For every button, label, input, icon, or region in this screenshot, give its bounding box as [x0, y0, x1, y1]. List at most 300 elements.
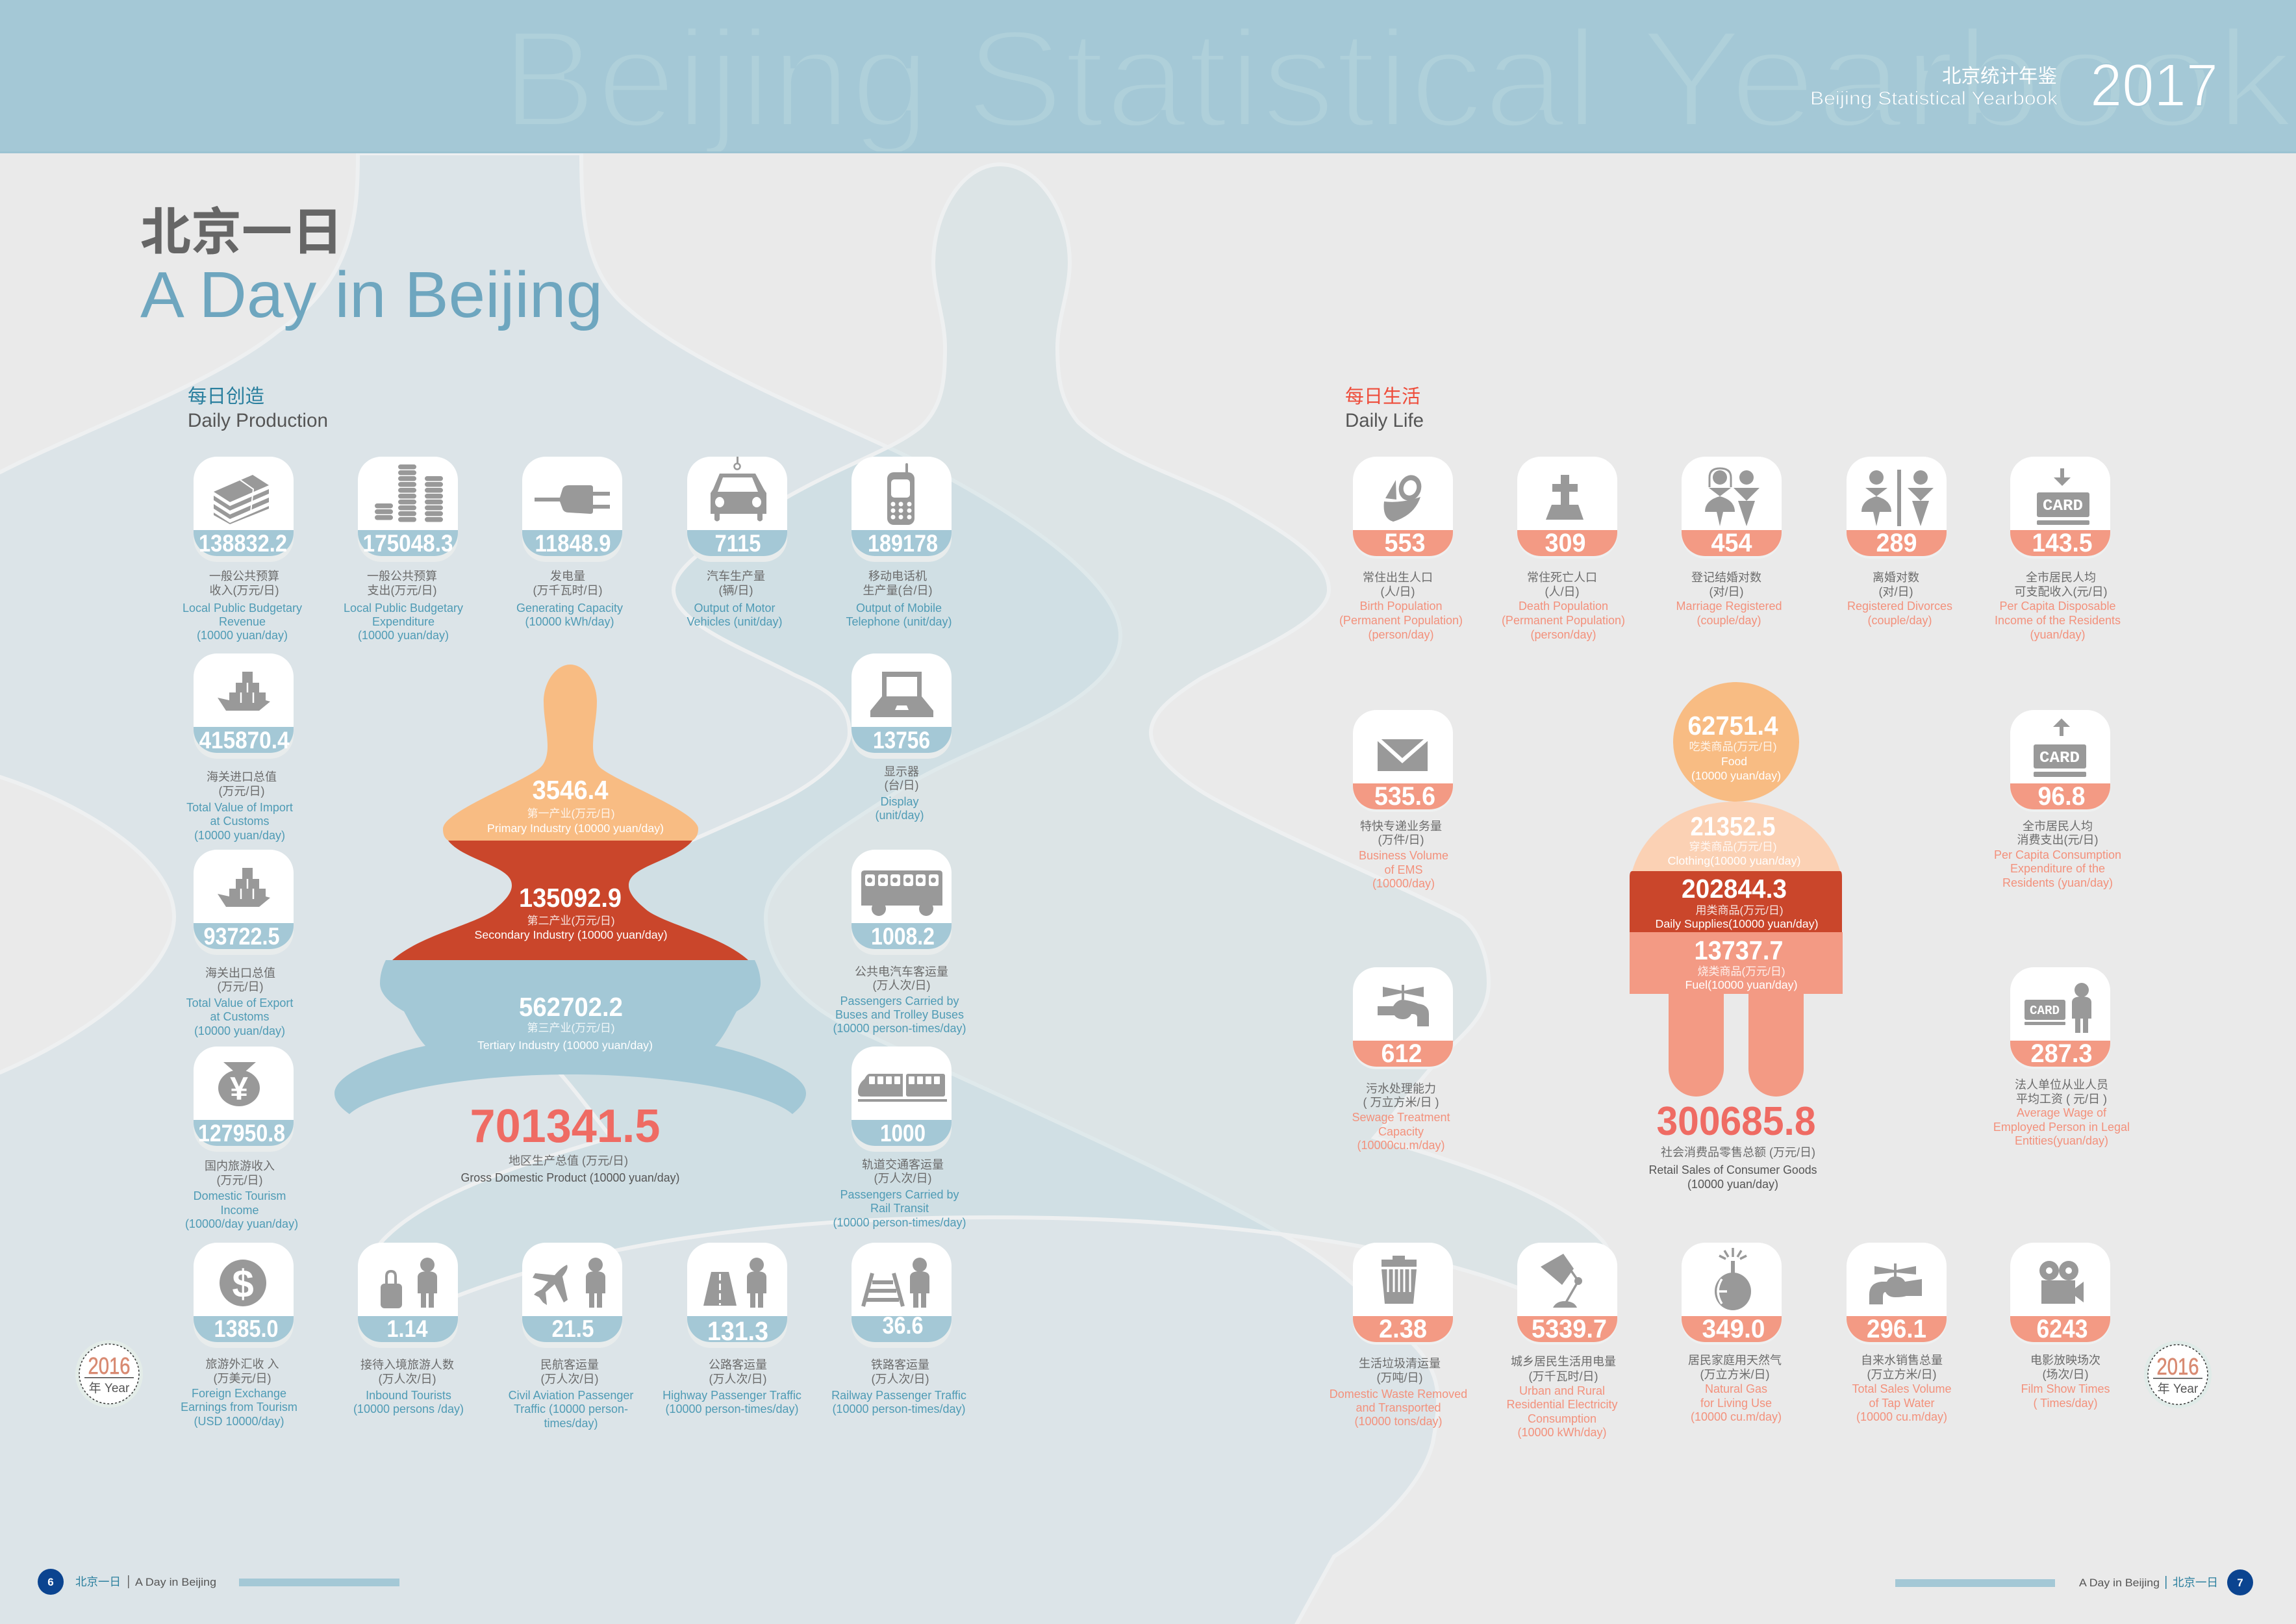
- value: 5339.7: [1532, 1315, 1607, 1343]
- label: (10000 yuan/day): [197, 629, 288, 642]
- label: [1847, 571, 1952, 627]
- value: 131.3: [707, 1316, 768, 1346]
- label: (台/日): [885, 779, 918, 792]
- footer: left: A Day in Beijing: [135, 1576, 216, 1588]
- label: 显示器: [884, 765, 919, 778]
- value: 287.3: [2030, 1039, 2093, 1068]
- label: Domestic Waste Removed: [1330, 1388, 1467, 1401]
- label: of EMS: [1384, 863, 1423, 876]
- label: Local Public Budgetary: [344, 602, 463, 615]
- value: tertiary: [477, 992, 653, 1052]
- label: [1852, 1354, 1952, 1423]
- value: tertiary: 562702.2: [519, 992, 623, 1022]
- value: clothing: 21352.5: [1690, 811, 1776, 841]
- label: (万人次/日): [540, 1373, 599, 1386]
- label: (万千瓦时/日): [533, 584, 603, 597]
- label: [662, 1358, 801, 1415]
- icon: card with up arrow: [2034, 718, 2086, 777]
- vase: tertiary industry: [334, 960, 806, 1114]
- icon: laptop: [870, 672, 933, 717]
- label: Revenue: [219, 615, 266, 628]
- value: 415870.4: [199, 727, 290, 754]
- label: [1993, 1078, 2130, 1147]
- icon: film camera: [2039, 1261, 2084, 1304]
- label: [2021, 1354, 2110, 1410]
- icon: yuan bag: ¥: [230, 1071, 248, 1107]
- icon: cargo ship: [218, 868, 270, 907]
- value: 612: [1381, 1039, 1422, 1068]
- person chart: retail sales: [1630, 682, 1843, 1191]
- person: daily supplies torso: [1630, 871, 1842, 932]
- label: [1506, 1355, 1618, 1439]
- value: primary: 第一产业(万元/日): [527, 807, 615, 820]
- label: (万千瓦时/日): [1529, 1370, 1598, 1383]
- value: 11848.9: [535, 530, 611, 557]
- icon: card with down arrow: CARD: [2043, 498, 2083, 515]
- label: 铁路客运量: [871, 1358, 929, 1371]
- label: (10000 yuan/day): [194, 1024, 285, 1037]
- label: Residential Electricity: [1506, 1398, 1618, 1411]
- label: 公共电汽车客运量: [855, 965, 948, 978]
- label: 可支配收入(元/日): [2015, 585, 2107, 598]
- card: budget revenue: [183, 457, 302, 642]
- label: [1352, 1082, 1450, 1152]
- footer: left: 6: [47, 1576, 54, 1588]
- label: (10000 person-times/day): [833, 1216, 966, 1229]
- label: Birth Population: [1359, 600, 1443, 613]
- badge: year 2016 right: 2016: [2156, 1353, 2199, 1380]
- card: budget expenditure: [344, 457, 463, 642]
- value: secondary: Secondary Industry (10000 yuan/day): [474, 928, 668, 941]
- card: highway traffic: [662, 1243, 801, 1415]
- card: railway traffic: [831, 1243, 966, 1415]
- label: (万人次/日): [872, 1373, 929, 1386]
- card: mobile telephones: [846, 457, 952, 628]
- label: Natural Gas: [1705, 1382, 1767, 1395]
- label: [353, 1358, 464, 1415]
- label: 海关出口总值: [205, 967, 275, 980]
- label: 常住死亡人口: [1527, 571, 1597, 584]
- label: 一般公共预算: [209, 570, 279, 583]
- label: Expenditure: [372, 615, 435, 628]
- value: 289: [1876, 529, 1917, 557]
- footer: left: [38, 1569, 399, 1595]
- total: GDP: 701341.5: [470, 1100, 660, 1152]
- value: clothing: [1668, 811, 1800, 867]
- icon: mobile phone: [887, 463, 915, 525]
- value: daily supplies: 202844.3: [1682, 874, 1787, 904]
- value: 1.14: [387, 1315, 428, 1342]
- label: Total Value of Export: [186, 996, 293, 1009]
- label: (couple/day): [1867, 614, 1932, 627]
- card: domestic waste: [1330, 1243, 1467, 1428]
- label: (万元/日): [217, 980, 264, 993]
- value: secondary: 第二产业(万元/日): [527, 915, 615, 927]
- label: 生产量(台/日): [863, 584, 933, 597]
- label: Residents (yuan/day): [2002, 876, 2113, 889]
- label: Generating Capacity: [516, 602, 623, 615]
- label: Entities(yuan/day): [2015, 1134, 2108, 1147]
- value: 189178: [868, 530, 938, 557]
- label: Income of the Residents: [1995, 614, 2121, 627]
- label: 城乡居民生活用电量: [1511, 1355, 1616, 1368]
- person: clothing shoulders: [1632, 802, 1840, 871]
- label: (unit/day): [875, 809, 924, 822]
- label: (万吨/日): [1377, 1371, 1422, 1384]
- label: (万元/日): [218, 785, 265, 798]
- label: (10000 yuan/day): [194, 829, 285, 842]
- label: Inbound Tourists: [366, 1389, 451, 1402]
- label: (万人次/日): [709, 1373, 766, 1386]
- card: bus passengers: [833, 850, 966, 1035]
- total: retail sales: Retail Sales of Consumer Goods: [1648, 1163, 1817, 1176]
- value: 1385.0: [214, 1315, 278, 1342]
- label: Marriage Registered: [1676, 600, 1782, 613]
- label: Output of Motor: [694, 602, 776, 615]
- label: Capacity: [1378, 1125, 1424, 1138]
- label: Total Value of Import: [186, 801, 293, 814]
- label: (10000cu.m/day): [1357, 1139, 1445, 1152]
- label: 旅游外汇收 入: [205, 1358, 279, 1371]
- label: Railway Passenger Traffic: [831, 1389, 966, 1402]
- title: A Day in Beijing: [140, 259, 603, 331]
- card: deaths: [1502, 457, 1625, 641]
- label: 特快专递业务量: [1360, 820, 1442, 833]
- label: 全市居民人均: [2023, 820, 2093, 833]
- label: 全市居民人均: [2026, 571, 2096, 584]
- label: (万人次/日): [873, 979, 930, 992]
- vase chart: gross domestic product: [334, 665, 806, 1184]
- label: [186, 770, 293, 842]
- icon: tap: [1378, 985, 1429, 1026]
- label: 公路客运量: [709, 1358, 767, 1371]
- icon: rail track and person: [863, 1258, 929, 1308]
- label: (10000 persons /day): [353, 1402, 464, 1415]
- label: [183, 570, 302, 642]
- footer: left: 北京一日: [75, 1575, 121, 1588]
- person: food head: [1673, 682, 1799, 802]
- label: 接待入境旅游人数: [360, 1358, 454, 1371]
- icon: separated couple: [1861, 470, 1934, 526]
- icon: plug: [535, 485, 610, 514]
- label: [833, 965, 966, 1035]
- value: tertiary: Tertiary Industry (10000 yuan/day): [477, 1039, 653, 1052]
- value: food: 吃类商品(万元/日): [1689, 741, 1777, 753]
- label: Per Capita Consumption: [1994, 848, 2121, 861]
- card: divorces: [1847, 457, 1952, 627]
- icon: car: [711, 457, 766, 521]
- total: GDP: [461, 1100, 679, 1184]
- label: [516, 570, 623, 628]
- background shape: vase silhouette: [375, 164, 1610, 1317]
- label: (10000 person-times/day): [832, 1402, 966, 1415]
- label: and Transported: [1356, 1401, 1441, 1414]
- value: 1008.2: [871, 923, 935, 950]
- label: Average Wage of: [2017, 1106, 2107, 1119]
- label: (万件/日): [1378, 833, 1424, 846]
- card: civil aviation: [509, 1243, 633, 1430]
- label: [344, 570, 463, 642]
- card: motor vehicles: [687, 457, 787, 628]
- label: Telephone (unit/day): [846, 615, 952, 628]
- label: 污水处理能力: [1366, 1082, 1436, 1095]
- label: Employed Person in Legal: [1993, 1121, 2130, 1134]
- label: Passengers Carried by: [840, 1188, 959, 1201]
- value: daily supplies: [1655, 874, 1819, 930]
- icon: road and person: [703, 1258, 766, 1308]
- total: retail sales: 300685.8: [1656, 1099, 1816, 1144]
- card: marriages: [1676, 457, 1782, 627]
- label: 消费支出(元/日): [2017, 833, 2098, 846]
- label: [1359, 820, 1448, 890]
- total: retail sales: [1648, 1099, 1817, 1191]
- value: primary: 3546.4: [533, 775, 609, 805]
- label: [1330, 1357, 1467, 1428]
- label: 汽车生产量: [707, 570, 765, 583]
- label: Registered Divorces: [1847, 600, 1952, 613]
- label: (10000 person-times/day): [833, 1022, 966, 1035]
- icon: bride and groom: [1705, 468, 1760, 526]
- label: (10000 kWh/day): [1517, 1426, 1607, 1439]
- label: (万立方米/日): [1867, 1368, 1937, 1381]
- label: 常住出生人口: [1363, 571, 1433, 584]
- label: 生活垃圾清运量: [1359, 1357, 1441, 1370]
- heading: daily life: 每日生活: [1345, 386, 1420, 407]
- label: 一般公共预算: [367, 570, 437, 583]
- label: (person/day): [1368, 628, 1434, 641]
- icon: gravestone: [1546, 475, 1583, 520]
- label: ( 万立方米/日 ): [1363, 1096, 1439, 1109]
- header watermark: Beijing: [501, 1, 930, 157]
- label: Death Population: [1519, 600, 1608, 613]
- label: for Living Use: [1700, 1397, 1772, 1410]
- value: food: (10000 yuan/day): [1691, 769, 1781, 782]
- icon: coin stacks: [375, 464, 443, 522]
- label: [1688, 1354, 1782, 1423]
- value: 21.5: [552, 1315, 594, 1342]
- card: births: [1339, 457, 1463, 641]
- heading: daily life: [1345, 386, 1424, 431]
- label: (USD 10000/day): [194, 1415, 284, 1428]
- vase: secondary industry: [392, 841, 748, 960]
- card: consumption expenditure: [1994, 710, 2121, 889]
- label: 移动电话机: [868, 570, 927, 583]
- card: imports: [186, 653, 294, 842]
- label: Foreign Exchange: [192, 1387, 286, 1400]
- card: tap water: [1847, 1243, 1952, 1423]
- value: tertiary: 第三产业(万元/日): [527, 1022, 615, 1034]
- value: 553: [1385, 529, 1425, 557]
- label: Traffic (10000 person-: [514, 1402, 628, 1415]
- person: fuel legs: [1630, 932, 1843, 1097]
- year: 2017: [2090, 51, 2218, 119]
- label: [181, 1358, 297, 1428]
- label: Urban and Rural: [1519, 1384, 1605, 1397]
- value: clothing: 穿类商品(万元/日): [1689, 841, 1777, 853]
- icon: card and person: [2025, 983, 2091, 1033]
- label: 发电量: [550, 570, 585, 583]
- card: generating capacity: [516, 457, 623, 628]
- label: at Customs: [210, 815, 270, 828]
- label: (人/日): [1545, 585, 1580, 598]
- label: Expenditure of the: [2010, 862, 2105, 875]
- label: [186, 967, 293, 1037]
- label: Film Show Times: [2021, 1382, 2110, 1395]
- card: electricity: [1506, 1243, 1618, 1439]
- label: Passengers Carried by: [840, 995, 959, 1008]
- value: fuel: Fuel(10000 yuan/day): [1685, 978, 1798, 991]
- label: 居民家庭用天然气: [1688, 1354, 1782, 1367]
- heading: daily production: [188, 386, 328, 431]
- card: display: [852, 653, 952, 822]
- label: [1676, 571, 1782, 627]
- value: food: Food: [1721, 755, 1747, 768]
- label: Rail Transit: [870, 1202, 929, 1215]
- value: 143.5: [2032, 529, 2093, 557]
- label: [1995, 571, 2121, 641]
- card: rail transit: [833, 1047, 966, 1229]
- label: (对/日): [1878, 585, 1913, 598]
- card: natural gas: [1682, 1243, 1782, 1423]
- label: (10000 kWh/day): [525, 615, 614, 628]
- value: 1000: [880, 1120, 926, 1147]
- header watermark: Statistical: [965, 1, 1598, 157]
- label: Highway Passenger Traffic: [662, 1389, 801, 1402]
- card: sewage treatment: [1352, 967, 1453, 1152]
- value: 36.6: [882, 1312, 924, 1339]
- label: (10000/day): [1372, 877, 1435, 890]
- card: foreign exchange: [181, 1243, 297, 1428]
- label: [846, 570, 952, 628]
- icon: card and person: CARD: [2030, 1004, 2060, 1018]
- label: (yuan/day): [2030, 628, 2086, 641]
- label: (10000 tons/day): [1354, 1415, 1443, 1428]
- label: Earnings from Tourism: [181, 1401, 297, 1414]
- label: Civil Aviation Passenger: [509, 1389, 633, 1402]
- icon: plane and person: [533, 1258, 605, 1308]
- yearbook name: 北京统计年鉴: [1942, 66, 2057, 87]
- card: film shows: [2010, 1243, 2110, 1410]
- label: Vehicles (unit/day): [687, 615, 783, 628]
- label: (万立方米/日): [1700, 1368, 1769, 1381]
- label: 自来水销售总量: [1861, 1354, 1943, 1367]
- label: [509, 1358, 633, 1430]
- label: [875, 765, 924, 822]
- label: Income: [220, 1204, 259, 1217]
- label: 民航客运量: [540, 1358, 599, 1371]
- value: fuel: [1685, 935, 1798, 991]
- value: 6243: [2037, 1315, 2088, 1343]
- value: 349.0: [1702, 1315, 1765, 1343]
- value: 13756: [873, 727, 930, 754]
- label: 海关进口总值: [207, 770, 277, 783]
- label: Buses and Trolley Buses: [835, 1008, 964, 1021]
- badge: year 2016 left: 年 Year: [89, 1381, 130, 1395]
- label: of Tap Water: [1869, 1397, 1935, 1410]
- title: [140, 203, 603, 331]
- label: 电影放映场次: [2030, 1354, 2100, 1367]
- label: (10000 yuan/day): [358, 629, 449, 642]
- label: [831, 1358, 966, 1415]
- label: Output of Mobile: [856, 602, 942, 615]
- label: (10000 person-times/day): [665, 1402, 799, 1415]
- label: (10000 cu.m/day): [1856, 1410, 1947, 1423]
- value: fuel: 13737.7: [1694, 935, 1784, 965]
- value: 535.6: [1374, 782, 1435, 811]
- label: (万元/日): [217, 1174, 262, 1187]
- icon: trash bin: [1381, 1256, 1417, 1304]
- label: (person/day): [1530, 628, 1596, 641]
- label: Sewage Treatment: [1352, 1111, 1450, 1124]
- value: primary: [487, 775, 664, 835]
- value: 175048.3: [362, 530, 453, 557]
- value: primary: Primary Industry (10000 yuan/day): [487, 822, 664, 835]
- card: domestic tourism: [185, 1047, 298, 1230]
- icon: luggage and person: [381, 1258, 437, 1308]
- icon: card with down arrow: [2037, 468, 2089, 525]
- value: 7115: [714, 530, 761, 557]
- badge: year 2016 left: [75, 1340, 143, 1408]
- label: 轨道交通客运量: [862, 1158, 944, 1171]
- label: (Permanent Population): [1502, 614, 1625, 627]
- footer: right: A Day in Beijing: [2079, 1577, 2160, 1589]
- label: Domestic Tourism: [194, 1189, 286, 1202]
- label: 支出(万元/日): [368, 584, 436, 597]
- header band: [0, 0, 2296, 157]
- label: (10000/day yuan/day): [185, 1217, 298, 1230]
- label: (万人次/日): [874, 1172, 931, 1185]
- label: [1994, 820, 2121, 889]
- label: 法人单位从业人员: [2015, 1078, 2108, 1091]
- label: [185, 1160, 298, 1230]
- badge: year 2016 right: 年 Year: [2158, 1382, 2199, 1396]
- label: Per Capita Disposable: [1999, 600, 2116, 613]
- card: inbound tourists: [353, 1243, 464, 1415]
- label: 平均工资 ( 元/日 ): [2016, 1093, 2107, 1106]
- value: fuel: 烧类商品(万元/日): [1697, 965, 1785, 978]
- icon: dollar coin: [220, 1260, 266, 1306]
- value: 138832.2: [199, 530, 287, 557]
- label: Total Sales Volume: [1852, 1382, 1952, 1395]
- total: GDP: 地区生产总值 (万元/日): [509, 1154, 628, 1167]
- label: ( Times/day): [2033, 1397, 2098, 1410]
- label: [687, 570, 783, 628]
- badge: year 2016 left: 2016: [88, 1352, 130, 1379]
- icon: card with up arrow: CARD: [2039, 750, 2080, 767]
- label: (场次/日): [2042, 1368, 2089, 1381]
- label: [1502, 571, 1625, 641]
- card: disposable income: [1995, 457, 2121, 641]
- icon: yuan bag: [218, 1062, 260, 1107]
- label: 离婚对数: [1873, 571, 1919, 584]
- icon: bus: [861, 870, 942, 916]
- value: food: 62751.4: [1687, 711, 1778, 741]
- icon: swaddled baby: [1384, 472, 1425, 522]
- value: secondary: [474, 883, 668, 941]
- value: 454: [1711, 529, 1752, 557]
- label: 国内旅游收入: [205, 1160, 275, 1173]
- label: (人/日): [1381, 585, 1415, 598]
- label: 收入(万元/日): [209, 584, 279, 597]
- header watermark: [516, 29, 2288, 151]
- icon: gas burner flask: [1715, 1248, 1751, 1310]
- label: times/day): [544, 1417, 598, 1430]
- label: Business Volume: [1359, 849, 1448, 862]
- total: retail sales: 社会消费品零售总额 (万元/日): [1661, 1146, 1815, 1159]
- label: (对/日): [1709, 585, 1743, 598]
- value: 93722.5: [204, 923, 279, 950]
- heading: daily production: Daily Production: [188, 410, 328, 431]
